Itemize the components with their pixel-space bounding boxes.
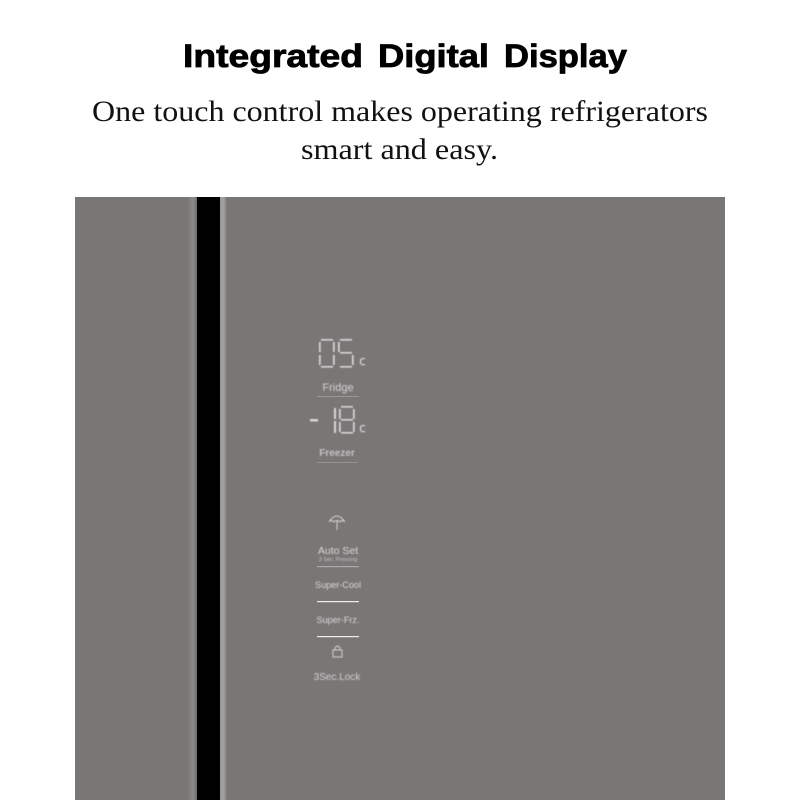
icon: umbrella auto set: [329, 516, 345, 530]
display: freezer temperature: [310, 406, 365, 434]
icon: lock: [333, 646, 342, 657]
label: Fridge: [317, 382, 359, 397]
title: Integrated: [183, 38, 363, 74]
display: fridge temperature: [319, 339, 365, 368]
button: Super-Frz.: [316, 615, 360, 637]
subtitle text: smart and easy.: [301, 133, 498, 166]
subtitle text: One touch control makes operating refrigerators: [92, 95, 708, 128]
title: Display: [504, 38, 627, 74]
label: Freezer: [317, 448, 358, 463]
panel: refrigerator door: [75, 197, 725, 800]
button: Super-Frz.: Super-Frz.: [316, 615, 360, 626]
button: Super-Cool: [315, 580, 361, 602]
label: Freezer: Freezer: [319, 448, 355, 459]
button: Auto Set: [317, 545, 359, 567]
label: Fridge: Fridge: [322, 382, 354, 394]
button: Auto Set: Auto Set: [318, 545, 358, 557]
label: 3Sec.Lock: 3Sec.Lock: [314, 672, 361, 683]
button: Super-Cool: Super-Cool: [315, 580, 361, 591]
button: Auto Set: 3 Sec. Pressing: [319, 557, 357, 563]
subtitle text: [92, 95, 708, 166]
title: Digital: [378, 38, 489, 74]
door gap: black strip: [197, 197, 220, 800]
